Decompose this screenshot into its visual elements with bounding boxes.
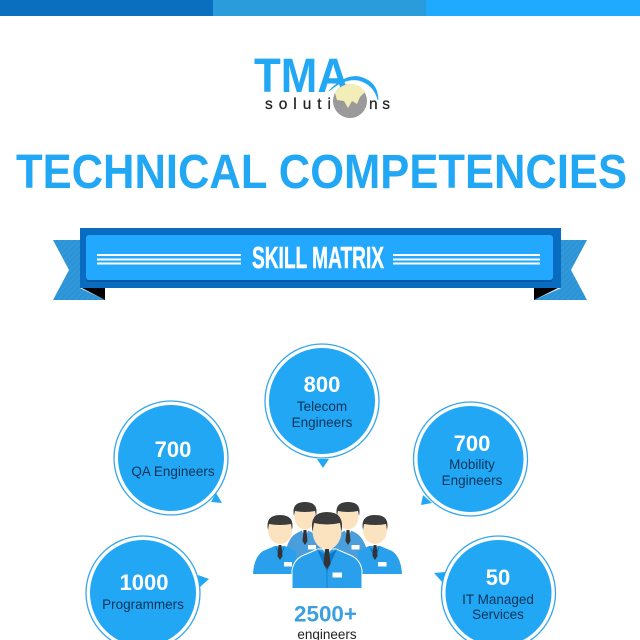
bubble: telecom engineers: Engineers [292,415,353,430]
bubble: IT managed services: IT Managed [462,592,534,607]
logo: TMA solutions: ns [369,96,390,113]
logo arc [329,77,378,100]
bubble: mobility engineers [414,402,528,516]
bubble: IT managed services: Services [472,607,524,622]
ribbon banner: skill matrix [53,228,587,300]
center engineer [292,512,362,588]
bubble: IT managed services: 50 [486,565,510,590]
front left engineer [253,515,296,574]
ribbon fold shadows [82,288,558,300]
bubble: telecom engineers: 800 [304,372,340,397]
logo globe [333,84,367,118]
bubble: QA engineers: 700 [155,437,191,462]
ribbon right tail [534,240,587,300]
bubble: programmers: Programmers [102,597,184,612]
bubble: QA engineers: QA Engineers [131,464,215,479]
bubble: mobility engineers: Engineers [442,473,503,488]
bubble: mobility engineers: 700 [454,431,490,456]
ribbon label: SKILL MATRIX [252,241,384,275]
left lines [97,254,241,264]
ribbon inner panel [86,235,553,282]
logo wordmark TMA: TMA [254,50,349,103]
bubble: telecom engineers: Telecom [297,399,347,414]
top color bar [0,0,640,16]
icon: engineers team [253,502,402,588]
ribbon left tail [53,240,105,300]
logo word solutions: soluti [265,96,331,113]
front right engineer [358,515,402,574]
logo: TMA solutions [254,50,390,118]
bubble: telecom engineers [265,344,379,468]
back left engineer [286,502,326,560]
right lines [393,254,540,264]
ribbon body [80,228,561,288]
bubble: QA engineers [114,401,228,515]
bubble: programmers: 1000 [120,570,168,595]
bubble: IT managed services [434,536,556,640]
bubble: mobility engineers: Mobility [449,457,495,472]
bubble: programmers [86,536,209,640]
total figure: 2500+: 2500+ [294,602,357,626]
back right engineer [328,502,367,560]
